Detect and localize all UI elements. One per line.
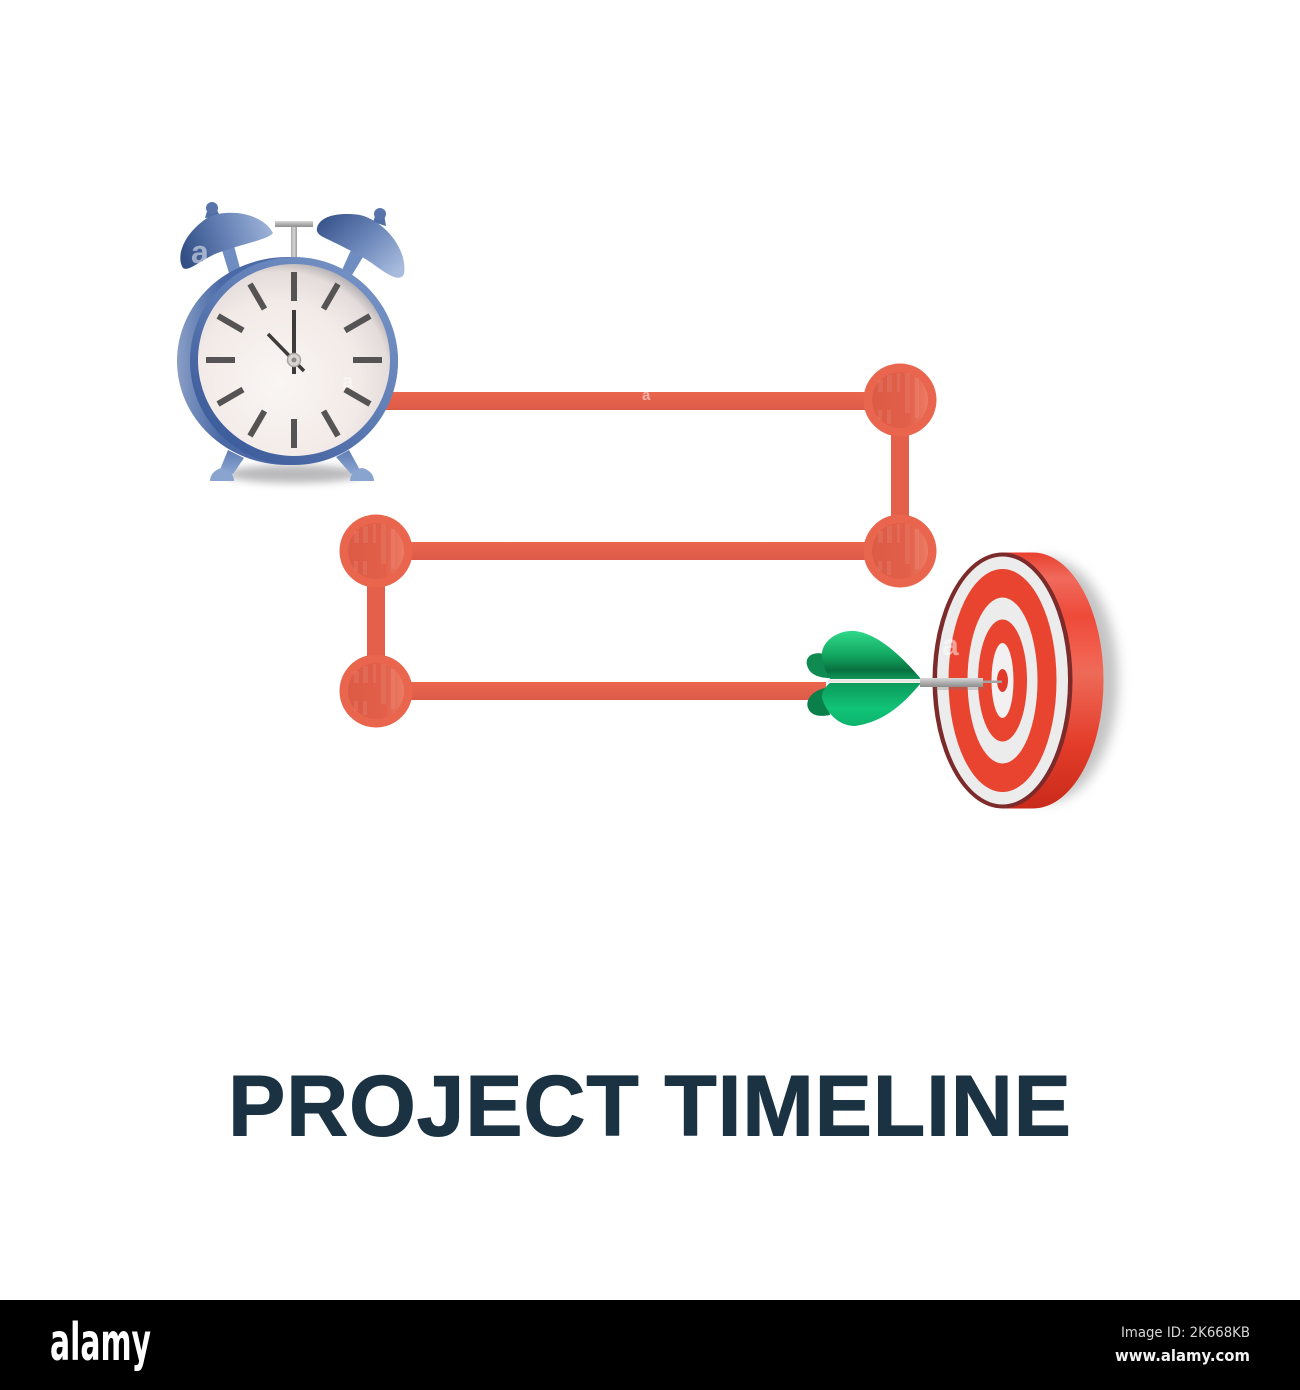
shaft: [828, 678, 1002, 690]
segment: clock to first node: [385, 392, 900, 410]
watermark glyphs on clock: a: [191, 234, 209, 270]
image id: Image ID: 2K668KB: [1121, 1325, 1250, 1341]
node: middle left: [340, 514, 412, 588]
title: PROJECT TIMELINE: [228, 1058, 1071, 1154]
watermark glyph on line: a: [642, 387, 651, 404]
icon: alarm clock: [177, 202, 404, 483]
target shadow: [974, 558, 1118, 802]
icon: target: [932, 552, 1118, 808]
segment: vertical left: [367, 551, 385, 691]
left bell: [180, 202, 273, 269]
alamy logo: alamy: [50, 1313, 151, 1373]
clock face: [198, 264, 390, 456]
watermark glyphs on clock: [191, 234, 354, 393]
winding key: [275, 221, 313, 260]
node: middle right: [864, 514, 936, 588]
clock shadow: [226, 465, 362, 483]
watermark glyphs on clock: a: [342, 371, 354, 393]
clock body: [177, 257, 398, 465]
website: www.alamy.com: [1115, 1346, 1250, 1365]
segment: middle horizontal: [376, 542, 900, 560]
lower feather: [822, 683, 921, 726]
node: top right: [864, 364, 936, 436]
hour ticks: [206, 272, 382, 448]
clock legs and feet: [210, 450, 374, 481]
back fletching: [807, 653, 830, 716]
upper feather: [822, 631, 921, 679]
target side: [1002, 552, 1104, 808]
segment: bottom horizontal to arrow: [376, 682, 826, 700]
watermark glyph on target: a: [942, 629, 959, 662]
segment: vertical right: [891, 400, 909, 551]
node: bottom left: [340, 654, 412, 728]
target rings: [932, 552, 1072, 808]
clock hands: [268, 310, 304, 374]
icon: arrow: [807, 631, 1002, 726]
bell stems: [222, 246, 363, 275]
footer bar: [0, 1300, 1300, 1390]
right bell: [317, 208, 404, 278]
timeline connector path: [367, 387, 909, 700]
